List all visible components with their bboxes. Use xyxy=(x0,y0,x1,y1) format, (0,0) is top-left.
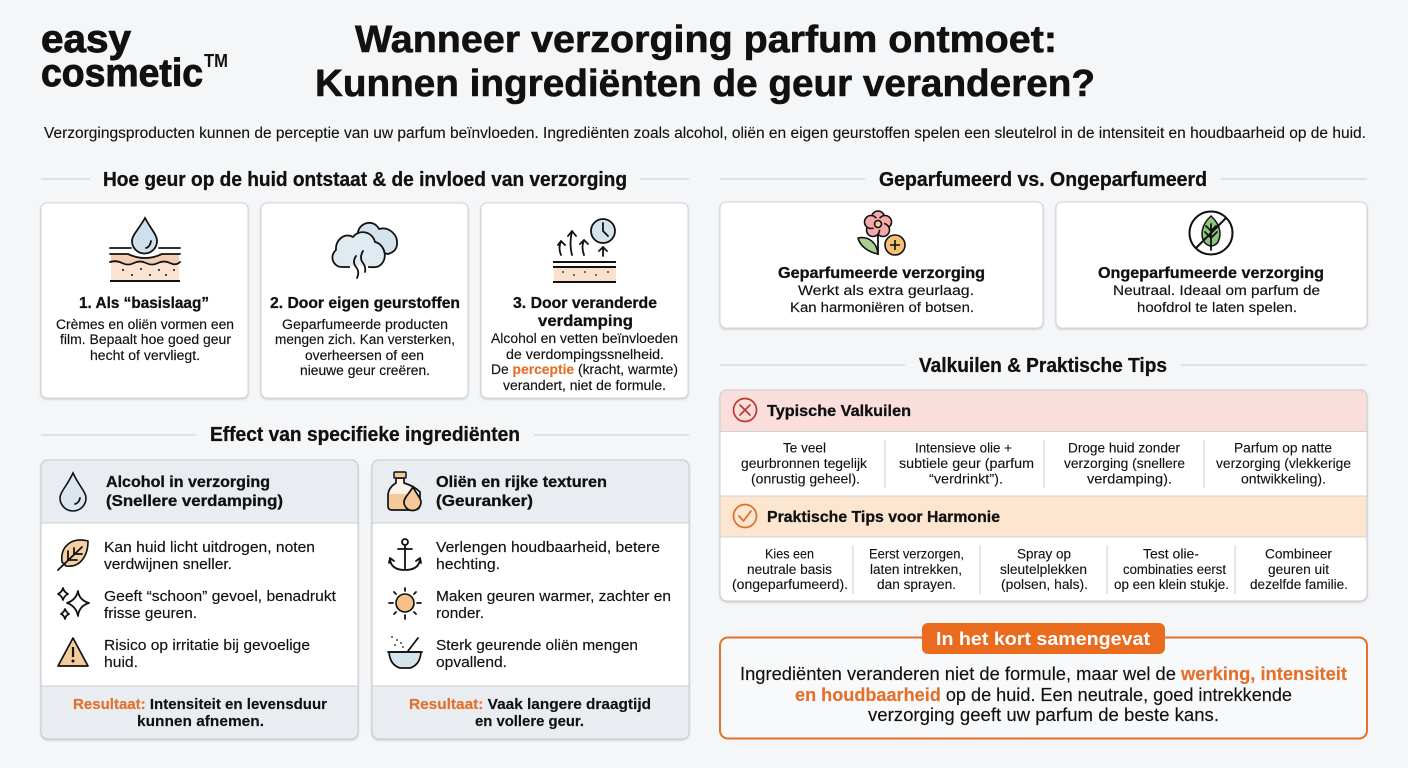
item text: Risico op irritatie bij gevoelige xyxy=(104,637,310,654)
card title: Ongeparfumeerde verzorging xyxy=(1098,265,1324,282)
tip 2: laten intrekken, xyxy=(870,562,962,577)
title: Kunnen ingrediënten de geur veranderen? xyxy=(315,63,1095,105)
pitfall 1 xyxy=(741,440,867,486)
item text xyxy=(104,637,310,671)
card text: Crèmes en oliën vormen een xyxy=(56,317,234,332)
card 3: veranderde verdamping: verdamping xyxy=(538,313,633,330)
item text: huid. xyxy=(104,654,138,671)
pitfall 3: Droge huid zonder xyxy=(1068,440,1181,456)
pitfall 3 xyxy=(1064,440,1185,486)
icon: oil bottle xyxy=(388,472,421,510)
icon: bowl xyxy=(388,636,422,668)
pitfall 2: “verdrinkt”). xyxy=(929,472,1003,486)
card text: film. Bepaalt hoe goed geur xyxy=(60,332,232,347)
item text xyxy=(436,637,638,671)
panel heading xyxy=(436,474,607,510)
item text: Sterk geurende oliën mengen xyxy=(436,637,638,654)
card 3: veranderde verdamping xyxy=(481,203,688,398)
item text: Maken geuren warmer, zachter en xyxy=(436,588,671,605)
tip 1: (ongeparfumeerd). xyxy=(732,577,848,592)
pitfall 1: (onrustig geheel). xyxy=(751,472,860,486)
card text: Kan harmoniëren of botsen. xyxy=(790,300,974,315)
icon: sun xyxy=(389,588,421,619)
card title: 1. Als “basislaag” xyxy=(79,295,209,312)
heading: typische valkuilen: Typische Valkuilen xyxy=(767,403,911,420)
item text: Kan huid licht uitdrogen, noten xyxy=(104,539,315,556)
heading: vergelijking: Geparfumeerd vs. Ongeparfumeerd xyxy=(879,169,1207,191)
panel heading: (Geuranker) xyxy=(436,493,533,510)
icon: drop on skin xyxy=(110,218,180,281)
card text: hecht of vervliegt. xyxy=(90,348,200,363)
pitfall 4 xyxy=(1216,440,1351,486)
pitfall 2: Intensieve olie + xyxy=(915,440,1012,456)
item text: hechting. xyxy=(436,556,500,573)
logo: easy xyxy=(41,18,131,61)
callout: samenvatting xyxy=(720,623,1367,738)
tip 5: Combineer xyxy=(1265,546,1333,562)
logo xyxy=(41,18,228,95)
icon: cross xyxy=(734,398,756,422)
heading: praktische tips: Praktische Tips voor Harmonie xyxy=(767,509,1000,526)
result text xyxy=(409,696,651,730)
tip 3 xyxy=(1000,546,1088,592)
heading: hoe geur ontstaat: Hoe geur op de huid ontstaat & de invloed van verzorging xyxy=(103,169,627,191)
item text xyxy=(104,588,337,622)
icon: crossed leaf xyxy=(1190,212,1232,254)
pitfall 2: subtiele geur (parfum xyxy=(899,456,1034,471)
icon: anchor xyxy=(389,539,421,570)
card title: Geparfumeerde verzorging xyxy=(778,265,985,282)
pitfall 1: geurbronnen tegelijk xyxy=(741,456,867,471)
card text xyxy=(275,317,455,378)
card text: overheersen of een xyxy=(305,348,424,363)
heading: effect: Effect van specifieke ingrediënten xyxy=(210,424,520,446)
result text: kunnen afnemen. xyxy=(137,713,264,730)
icon: check xyxy=(734,504,756,528)
icon: drop xyxy=(60,473,86,511)
item text: Geeft “schoon” gevoel, benadrukt xyxy=(104,588,337,605)
panel heading: Oliën en rijke texturen xyxy=(436,474,607,491)
card text: De perceptie (kracht, warmte) xyxy=(491,362,678,377)
pitfall 4: Parfum op natte xyxy=(1234,440,1332,456)
pitfall 4: ontwikkeling). xyxy=(1241,472,1326,486)
card title: 3. Door veranderde xyxy=(513,295,657,312)
card text: mengen zich. Kan versterken, xyxy=(275,332,455,347)
summary text: en houdbaarheid op de huid. Een neutrale, goed intrekkende xyxy=(795,685,1292,705)
item text: opvallend. xyxy=(436,654,507,671)
section: hoe geur ontstaat xyxy=(41,169,689,398)
card text xyxy=(491,331,678,393)
logo: TM xyxy=(204,51,228,71)
section: geparfumeerd vs ongeparfumeerd xyxy=(720,169,1367,328)
icon: evaporation and clock xyxy=(553,219,616,282)
pitfall 4: verzorging (vlekkerige xyxy=(1216,456,1351,471)
summary text: verzorging geeft uw parfum de beste kans. xyxy=(868,705,1219,725)
card: ongeparfumeerd xyxy=(1056,202,1367,328)
panel: valkuilen en tips xyxy=(720,390,1367,601)
tip 2 xyxy=(869,546,964,592)
item text: Verlengen houdbaarheid, betere xyxy=(436,539,660,556)
tip 4: op een klein stukje. xyxy=(1114,577,1229,592)
tip 5: dezelfde familie. xyxy=(1250,577,1348,592)
panel heading xyxy=(106,474,283,510)
tip 1 xyxy=(732,546,848,592)
tip 3: (polsen, hals). xyxy=(1001,577,1088,592)
tip 5 xyxy=(1250,546,1348,592)
item text: verdwijnen sneller. xyxy=(104,556,232,573)
section: effect van ingredienten xyxy=(41,424,689,739)
icon: warning xyxy=(58,638,88,666)
heading: valkuilen en tips: Valkuilen & Praktische Tips xyxy=(919,355,1167,377)
pitfall 1: Te veel xyxy=(783,440,826,456)
card text: hoofdrol te laten spelen. xyxy=(1137,300,1297,315)
pitfall 3: verzorging (snellere xyxy=(1064,456,1185,471)
card text xyxy=(56,317,234,363)
card 2: eigen geurstoffen xyxy=(261,203,468,398)
item text xyxy=(104,539,315,573)
badge xyxy=(922,623,1165,654)
tip 3: sleutelplekken xyxy=(1000,562,1087,577)
tip 4: combinaties eerst xyxy=(1123,562,1226,577)
card text: Alcohol en vetten beïnvloeden xyxy=(491,331,678,346)
badge: In het kort samengevat xyxy=(936,628,1150,649)
card text: Neutraal. Ideaal om parfum de xyxy=(1113,283,1320,298)
item text xyxy=(436,539,660,573)
icon: leaf xyxy=(58,540,88,570)
item text xyxy=(436,588,671,622)
summary text xyxy=(740,664,1347,725)
icon: flower with plus xyxy=(858,211,905,255)
tip 4 xyxy=(1114,546,1229,592)
tip 1: neutrale basis xyxy=(747,562,832,577)
title xyxy=(315,19,1095,105)
card text: verandert, niet de formule. xyxy=(503,378,666,393)
card text: Werkt als extra geurlaag. xyxy=(798,283,974,298)
tip 2: Eerst verzorgen, xyxy=(869,546,964,562)
panel heading: (Snellere verdamping) xyxy=(106,493,283,510)
intro text: Verzorgingsproducten kunnen de perceptie van uw parfum beïnvloeden. Ingrediënten zoals alcohol, oliën en eigen geurstoffen spelen een sleutelrol in de intensiteit en houdbaarheid op de huid. xyxy=(44,125,1366,142)
title: Wanneer verzorging parfum ontmoet: xyxy=(355,19,1057,61)
item text: frisse geuren. xyxy=(104,605,197,622)
card text: nieuwe geur creëren. xyxy=(300,363,430,378)
card text xyxy=(1113,283,1320,315)
card text: Geparfumeerde producten xyxy=(282,317,448,332)
icon: cloud xyxy=(332,223,397,278)
panel: olien xyxy=(372,460,689,739)
card: geparfumeerd xyxy=(720,202,1043,328)
pitfall 2 xyxy=(899,440,1034,486)
section: valkuilen en tips xyxy=(720,355,1367,601)
tip 2: dan sprayen. xyxy=(877,577,956,592)
result text xyxy=(73,696,327,730)
card text: de verdompingssnelheid. xyxy=(506,347,664,362)
summary text: Ingrediënten veranderen niet de formule, maar wel de werking, intensiteit xyxy=(740,664,1347,684)
icon: sparkles xyxy=(58,588,89,619)
panel: alcohol xyxy=(41,460,358,739)
panel heading: Alcohol in verzorging xyxy=(106,474,270,491)
tip 3: Spray op xyxy=(1017,546,1071,562)
pitfall 3: verdamping). xyxy=(1087,472,1172,486)
card 1: basislaag xyxy=(41,203,248,398)
result text: en vollere geur. xyxy=(475,713,584,730)
tip 5: geuren uit xyxy=(1268,562,1329,577)
logo: cosmetic xyxy=(41,52,203,95)
result text: Resultaat: Vaak langere draagtijd xyxy=(409,696,651,713)
item text: ronder. xyxy=(436,605,484,622)
tip 1: Kies een xyxy=(765,546,814,562)
tip 4: Test olie- xyxy=(1143,546,1199,562)
card text xyxy=(790,283,974,315)
result text: Resultaat: Intensiteit en levensduur xyxy=(73,696,327,713)
card title: 2. Door eigen geurstoffen xyxy=(270,295,460,312)
